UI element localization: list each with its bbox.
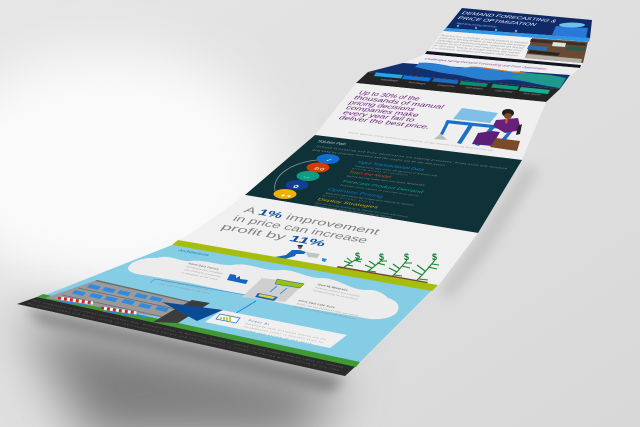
solution description: data ensures accurate forecasts and the results can be put into action bbox=[311, 148, 446, 167]
illustration: money plants bbox=[343, 251, 439, 282]
grass strip bbox=[37, 294, 360, 367]
challenge tab 6 bbox=[519, 87, 550, 94]
fine print: All product names and marks belong to their respective owners and the information is subject to change without notice at any time bbox=[27, 302, 341, 371]
statistic line 3: profit by 11% bbox=[218, 223, 328, 249]
step icons: ✓ bbox=[324, 158, 334, 163]
connector from building bbox=[150, 279, 252, 296]
data lake text: Stores raw and processed data and results bbox=[295, 303, 360, 317]
header navy band bbox=[446, 8, 592, 38]
step 1 text: Transactional data drives the decisions of forecasts and bbox=[353, 164, 439, 177]
web service text: Raw sales, store and product data is bbox=[160, 280, 213, 292]
illustration: person at desk bbox=[434, 108, 522, 151]
lime stripe bbox=[172, 240, 438, 291]
wave art bbox=[415, 62, 566, 88]
challenge tab 2 bbox=[402, 76, 431, 82]
intro text panel: in a consistent, automated and scalable cloud solution bbox=[430, 46, 520, 57]
header title: Real-time pricing decisions bbox=[455, 22, 498, 28]
step 2 text bbox=[345, 170, 427, 187]
challenge captions bbox=[379, 78, 543, 96]
illustration: money plants: $ bbox=[379, 252, 384, 262]
data lake text: for use by pricing models and dashboards bbox=[292, 306, 357, 320]
illustration: retail building bbox=[45, 280, 223, 323]
header blue strip bbox=[443, 28, 590, 42]
header title: PRICE OPTIMIZATION bbox=[456, 16, 538, 27]
awnings bbox=[58, 298, 137, 315]
step icons: ~~ bbox=[301, 175, 311, 180]
challenge tab 1 bbox=[374, 72, 403, 78]
data factory text: of pipelines in the cloud bbox=[180, 272, 219, 281]
sky blue background bbox=[43, 245, 432, 365]
header title: DEMAND FORECASTING & bbox=[460, 11, 558, 24]
step 1 text: pricing across all products bbox=[351, 167, 410, 176]
illustration: money plants: $ bbox=[355, 251, 360, 261]
power BI card bbox=[205, 310, 347, 348]
challenge tab 5 bbox=[491, 84, 519, 90]
illustration: person watering bbox=[275, 245, 327, 262]
panel: solution path bbox=[245, 135, 522, 233]
step 3 text: Evaluate sales signals to calculate price points bbox=[339, 183, 421, 197]
architecture heading: Architecture bbox=[177, 248, 210, 257]
intro text panel: Using data and advanced analytics, companies can forecast bbox=[436, 39, 525, 49]
step 1 text: Input Transactional Data bbox=[356, 160, 426, 172]
statistic text: thousands of manual bbox=[352, 95, 447, 110]
data factory text bbox=[180, 262, 224, 281]
panel: profit statistic bbox=[178, 195, 478, 286]
dark tower bbox=[153, 300, 210, 323]
panel: fold banner bbox=[403, 54, 580, 76]
statistic line 1: A 1% improvement bbox=[241, 206, 382, 237]
data factory text: Orchestrate data movement bbox=[185, 266, 224, 275]
navy arrow block bbox=[162, 302, 223, 321]
step 5 text: consistent results across the business in regular intervals bbox=[312, 204, 394, 219]
challenge captions: Large catalog bbox=[494, 89, 515, 93]
solution heading: Solution Path bbox=[316, 139, 348, 146]
machine learning text: Azure ML Webservice bbox=[316, 283, 349, 292]
step icons: ⚙⚙ bbox=[312, 167, 326, 172]
step 4 text: profit across stores bbox=[322, 194, 376, 204]
statistic text: pricing decisions bbox=[347, 100, 418, 113]
soil line bbox=[336, 266, 428, 284]
panel: header section bbox=[425, 8, 592, 68]
icon: dashboard bbox=[216, 314, 240, 323]
intro text panel: Retailers face a challenge of pricing products to maximize bbox=[440, 34, 530, 44]
banner caption: Challenges facing Demand Forecasting and Price Optimization bbox=[423, 57, 548, 71]
intro text panel bbox=[427, 31, 589, 67]
source note: Source: McKinsey pricing research on how companies manage thousands of pricing decisions every year bbox=[347, 132, 495, 152]
cloud bbox=[128, 257, 399, 319]
step 1 text bbox=[351, 160, 439, 177]
challenge captions: Store locations bbox=[464, 86, 485, 90]
step 3 text: Forecast Product Demand bbox=[341, 179, 425, 194]
statistic text: companies make bbox=[344, 105, 421, 118]
header data dots bbox=[457, 25, 517, 32]
intro text panel: demand for each product and compute the optimal price bbox=[434, 41, 524, 52]
data factory text: Azure Data Factory bbox=[187, 262, 221, 271]
step icons: ✿ bbox=[291, 184, 301, 190]
step 3 text bbox=[339, 179, 425, 197]
step 4 text: Apply price optimization that includes price elasticity for maximum bbox=[324, 191, 415, 207]
solution description: Demand forecasting and Price Optimization are ongoing processes. Preparation and improved bbox=[315, 145, 508, 170]
statistic line 2: in price can increase bbox=[230, 214, 370, 245]
intro text panel: profit while meeting demand across channels and seasons bbox=[438, 36, 528, 47]
illustration: money plants: $ bbox=[404, 252, 409, 262]
store photo bbox=[525, 38, 588, 63]
power BI card: recommended prices to business users for bbox=[242, 326, 325, 344]
machine learning text: Forecast demand and calculate bbox=[314, 287, 361, 298]
panel: challenges navy band bbox=[368, 62, 570, 89]
power BI card: review and action in the store bbox=[240, 329, 313, 345]
page edge dark base bbox=[17, 297, 357, 376]
windows bbox=[72, 284, 169, 318]
step icons bbox=[274, 154, 340, 199]
statistic text bbox=[337, 90, 447, 130]
step icons: ✦✦ bbox=[278, 193, 293, 199]
step 5 text: Roll out pricing strategies to improve decisions and ensure bbox=[314, 201, 410, 218]
challenge tab 3 bbox=[432, 78, 459, 84]
panel: dark challenge strip bbox=[356, 72, 560, 102]
process arc bbox=[275, 160, 317, 191]
header title bbox=[455, 11, 558, 28]
statistic text: every year fail to bbox=[341, 110, 417, 123]
data factory text: and schedule processing bbox=[183, 269, 222, 278]
intro text panel: for each store, helping to manage inventory and revenue bbox=[432, 44, 522, 54]
data lake text bbox=[292, 299, 360, 320]
statistic text: deliver the best price. bbox=[337, 115, 432, 130]
power BI card: Dashboards show forecasted demand and the bbox=[244, 323, 327, 341]
fold dark line bbox=[425, 51, 581, 68]
challenge captions: Competition bbox=[436, 83, 457, 88]
challenge tab 4 bbox=[459, 81, 488, 87]
step 4 text: Optimize Pricing bbox=[326, 187, 386, 199]
data lake icon bbox=[255, 293, 278, 301]
icon: factory bbox=[227, 274, 248, 284]
machine learning icon bbox=[275, 279, 304, 288]
step 5 text: Deploy Strategies bbox=[316, 197, 381, 209]
statistic text: Up to 30% of the bbox=[357, 90, 422, 102]
machine learning text: optimal pricing for all products bbox=[312, 290, 359, 301]
fine print: This infographic is for informational purposes only. Microsoft makes no warranties, express or implied, in this summary and all rights are reserved bbox=[31, 299, 345, 368]
data lake text: Azure Data Lake Store bbox=[297, 299, 336, 309]
panel: pricing statistic bbox=[315, 83, 546, 160]
step 2 text: Train the Model bbox=[347, 170, 393, 179]
illustration: money plants: $ bbox=[432, 252, 437, 262]
grey service box bbox=[242, 278, 305, 302]
connector to BI bbox=[236, 301, 256, 313]
challenge captions: Price changes bbox=[407, 81, 428, 85]
web service text: sent from the retailer to the cloud bbox=[158, 283, 211, 295]
panel: architecture bbox=[17, 240, 438, 376]
machine learning text bbox=[312, 283, 361, 301]
icon: city skyline bbox=[552, 22, 588, 38]
challenge captions: Data volume bbox=[522, 92, 543, 96]
power BI text: Power BI bbox=[247, 319, 270, 326]
challenge captions: Seasonal demand bbox=[379, 78, 400, 82]
step 2 text: Machine learning models learn from historic demand data bbox=[345, 174, 427, 187]
